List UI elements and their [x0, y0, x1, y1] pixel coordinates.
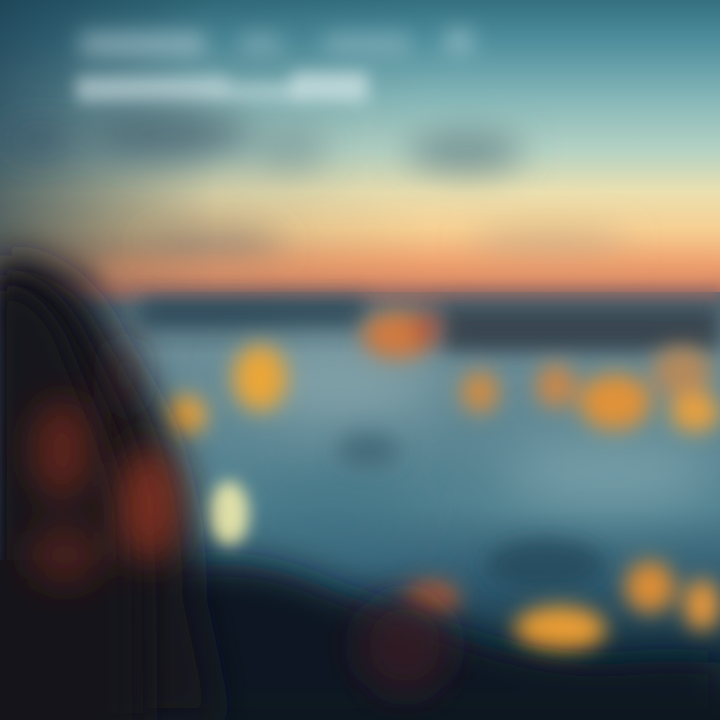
water highlights	[240, 350, 720, 560]
background: water	[0, 292, 720, 720]
pale light near the figure	[209, 481, 249, 547]
heading line one	[80, 30, 472, 56]
orange lights on the water	[165, 308, 720, 654]
dark clouds in the sky	[2, 111, 630, 259]
red glow on the figure	[27, 337, 182, 585]
horizon glow	[100, 262, 720, 286]
horizon blend	[0, 284, 720, 302]
distant dark shoreline	[140, 300, 720, 352]
heading line two	[76, 72, 368, 102]
silhouette of person at left	[0, 255, 220, 720]
foreground dark shore	[0, 564, 720, 720]
background: sunset sky	[0, 0, 720, 300]
heading: blurred title lines	[76, 30, 472, 102]
foreground warm object	[357, 595, 453, 695]
dark reflection spots	[336, 432, 605, 591]
